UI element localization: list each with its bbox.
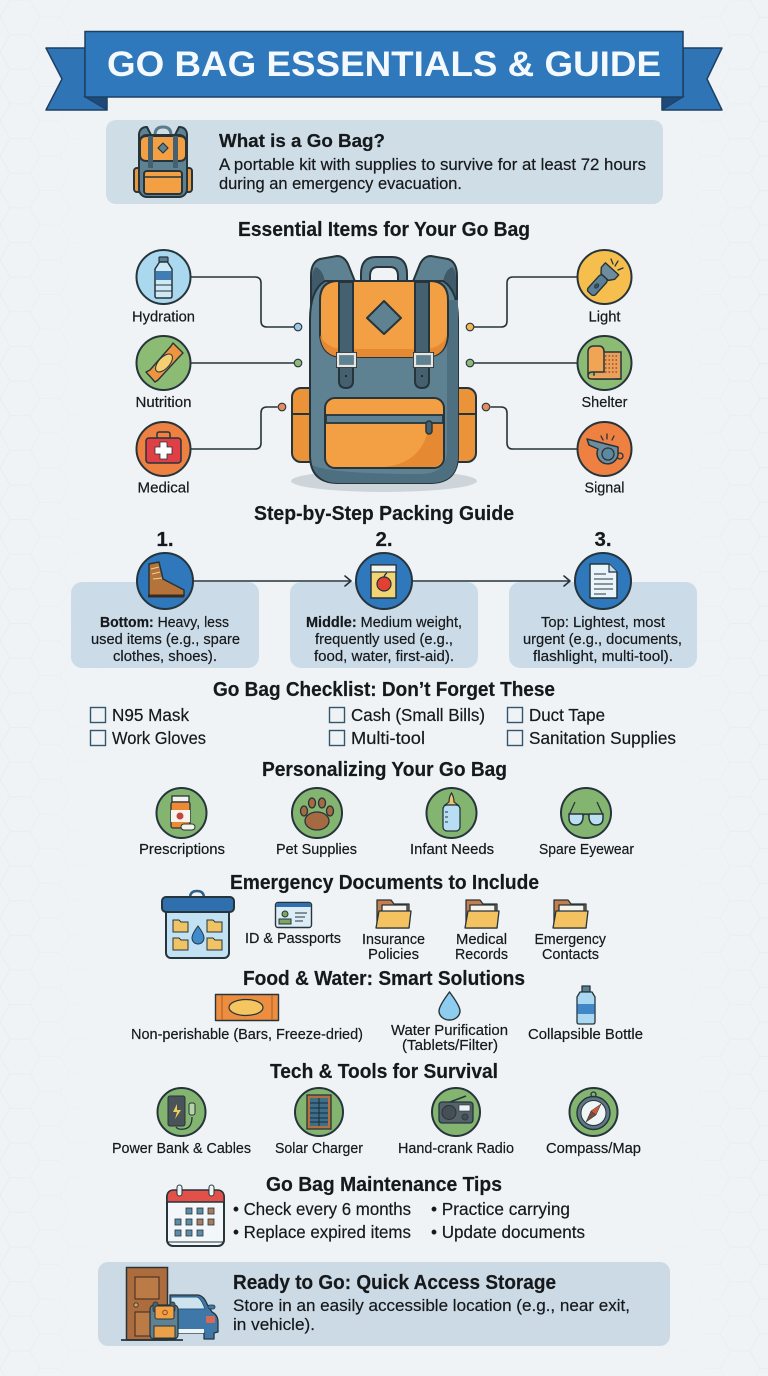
panel: what is a go bag — [106, 120, 663, 204]
arrow: step 1 to 2 — [193, 576, 351, 586]
item: medical — [136, 422, 190, 496]
item: solar charger: Solar Charger — [275, 1140, 363, 1157]
maintenance tips list: • Check every 6 months — [233, 1199, 411, 1219]
icon: whistle — [578, 422, 632, 476]
item: light — [578, 250, 632, 326]
heading: documents: Emergency Documents to Include — [230, 871, 539, 894]
item: power bank: Power Bank & Cables — [112, 1140, 251, 1157]
panel description: Store in an easily accessible location (e.g., near exit, — [233, 1297, 630, 1315]
heading: maintenance tips: Go Bag Maintenance Tips — [266, 1173, 502, 1196]
checklist: Duct Tape — [529, 705, 605, 725]
icon: first aid kit — [136, 422, 190, 476]
heading: food and water: Food & Water: Smart Solutions — [243, 967, 525, 990]
heading: checklist: Go Bag Checklist: Don’t Forget These — [213, 678, 555, 701]
icon: power bank — [158, 1088, 206, 1136]
arrow: step 2 to 3 — [412, 576, 570, 586]
maintenance tips list — [233, 1199, 585, 1242]
item: nutrition — [136, 336, 192, 411]
checklist: Multi-tool — [351, 728, 425, 748]
step 3: 3. — [594, 528, 612, 551]
icon: door, car and bag — [121, 1268, 218, 1340]
icon: calendar — [167, 1185, 224, 1246]
icon: paw — [292, 788, 342, 838]
step 1: 1. — [156, 528, 174, 551]
icon: boot — [137, 553, 193, 609]
icon: water bottle — [136, 250, 190, 304]
icon: food pack — [356, 553, 412, 609]
panel description: A portable kit with supplies to survive for at least 72 hours — [219, 156, 646, 174]
item: light: Light — [588, 308, 621, 326]
item: signal: Signal — [584, 480, 624, 496]
item: signal — [578, 422, 632, 496]
icon: snack bar — [136, 336, 190, 390]
item: water purification: (Tablets/Filter) — [402, 1037, 498, 1054]
icon: water drop — [439, 992, 460, 1020]
checklist: Cash (Small Bills) — [351, 705, 485, 725]
item: water purification: Water Purification — [391, 1022, 508, 1039]
panel: quick access storage — [98, 1262, 670, 1346]
step text — [91, 614, 240, 665]
step text: frequently used (e.g., — [315, 631, 453, 648]
item: medical records: Records — [455, 946, 508, 963]
title text: GO BAG ESSENTIALS & GUIDE — [107, 45, 661, 84]
checklist — [90, 705, 676, 748]
step text — [306, 614, 462, 665]
item: non-perishable food — [131, 994, 363, 1043]
item: medical: Medical — [138, 480, 190, 496]
item: pet supplies: Pet Supplies — [276, 841, 357, 858]
maintenance tips list: • Replace expired items — [233, 1222, 411, 1242]
item: id and passports — [245, 902, 341, 947]
maintenance tips list: • Update documents — [431, 1222, 585, 1242]
step 1 — [71, 528, 259, 668]
item: spare eyewear: Spare Eyewear — [539, 841, 634, 858]
item: insurance policies — [362, 900, 425, 963]
icon: pill bottle — [156, 788, 206, 838]
step 2: 2. — [375, 528, 393, 551]
panel description — [233, 1297, 630, 1334]
connector lines — [191, 277, 577, 449]
icon: radio — [432, 1088, 480, 1136]
item: medical records — [455, 900, 508, 963]
item: shelter — [578, 336, 632, 411]
panel description — [219, 156, 646, 193]
icon: small backpack — [134, 127, 192, 197]
item: collapsible bottle: Collapsible Bottle — [528, 1026, 643, 1043]
maintenance tips list: • Practice carrying — [431, 1199, 570, 1219]
icon: flashlight — [578, 250, 632, 304]
step text: Bottom: Heavy, less — [100, 614, 229, 631]
icon: folder — [465, 900, 499, 928]
item: insurance policies: Policies — [368, 946, 419, 963]
panel description: during an emergency evacuation. — [219, 175, 462, 193]
checklist: N95 Mask — [112, 705, 189, 725]
step 3 — [509, 528, 697, 668]
item: hand-crank radio: Hand-crank Radio — [398, 1140, 514, 1157]
item: emergency contacts — [534, 900, 606, 963]
item: collapsible bottle — [528, 986, 643, 1043]
icon: folder — [553, 900, 588, 928]
icon: mat and blanket — [578, 336, 632, 390]
step text: Top: Lightest, most — [541, 614, 666, 631]
step text: flashlight, multi-tool). — [533, 648, 673, 665]
icon: baby bottle — [426, 788, 476, 838]
icon: id card — [276, 902, 312, 928]
item: solar charger — [275, 1088, 363, 1157]
heading: tech and tools: Tech & Tools for Survival — [270, 1060, 498, 1083]
icon: document — [575, 553, 631, 609]
item: shelter: Shelter — [582, 394, 628, 411]
item: nutrition: Nutrition — [136, 394, 192, 411]
step text: Middle: Medium weight, — [306, 614, 462, 631]
item: hand-crank radio — [398, 1088, 514, 1157]
step text: clothes, shoes). — [113, 648, 217, 665]
item: prescriptions: Prescriptions — [139, 841, 225, 858]
icon: document bin — [162, 891, 234, 958]
item: non-perishable food: Non-perishable (Bars, Freeze-dried) — [131, 1026, 363, 1043]
item: emergency contacts: Emergency — [534, 931, 606, 948]
item: compass and map — [546, 1088, 641, 1157]
checklist: Work Gloves — [112, 728, 206, 748]
step text — [523, 614, 682, 665]
icon: food bar — [216, 994, 278, 1020]
checklist: Sanitation Supplies — [529, 728, 676, 748]
item: id and passports: ID & Passports — [245, 930, 341, 947]
item: emergency contacts: Contacts — [542, 946, 599, 963]
item: hydration — [132, 250, 195, 326]
item: hydration: Hydration — [132, 308, 195, 326]
icon: bottle — [577, 986, 595, 1024]
item: spare eyewear — [539, 788, 634, 858]
step text: food, water, first-aid). — [314, 648, 454, 665]
item: pet supplies — [276, 788, 357, 858]
heading: essential items: Essential Items for Your Go Bag — [238, 218, 530, 241]
step text: urgent (e.g., documents, — [523, 631, 682, 648]
panel heading: What is a Go Bag? — [219, 130, 385, 151]
item: prescriptions — [139, 788, 225, 858]
panel description: in vehicle). — [233, 1316, 315, 1334]
item: insurance policies: Insurance — [362, 931, 425, 948]
icon: compass — [570, 1088, 618, 1136]
item: infant needs: Infant Needs — [410, 841, 494, 858]
panel heading: Ready to Go: Quick Access Storage — [233, 1271, 556, 1294]
item: medical records: Medical — [456, 931, 507, 948]
title banner — [46, 32, 722, 110]
item: water purification — [391, 992, 508, 1054]
icon: solar panel — [295, 1088, 343, 1136]
step 2 — [290, 528, 478, 668]
icon: glasses — [561, 788, 611, 838]
heading: personalizing: Personalizing Your Go Bag — [262, 758, 507, 781]
central backpack illustration — [291, 256, 477, 492]
item: power bank — [112, 1088, 251, 1157]
heading: packing guide: Step-by-Step Packing Guide — [254, 502, 514, 525]
item: infant needs — [410, 788, 494, 858]
item: compass and map: Compass/Map — [546, 1140, 641, 1157]
icon: folder — [376, 900, 411, 928]
step text: used items (e.g., spare — [91, 631, 240, 648]
